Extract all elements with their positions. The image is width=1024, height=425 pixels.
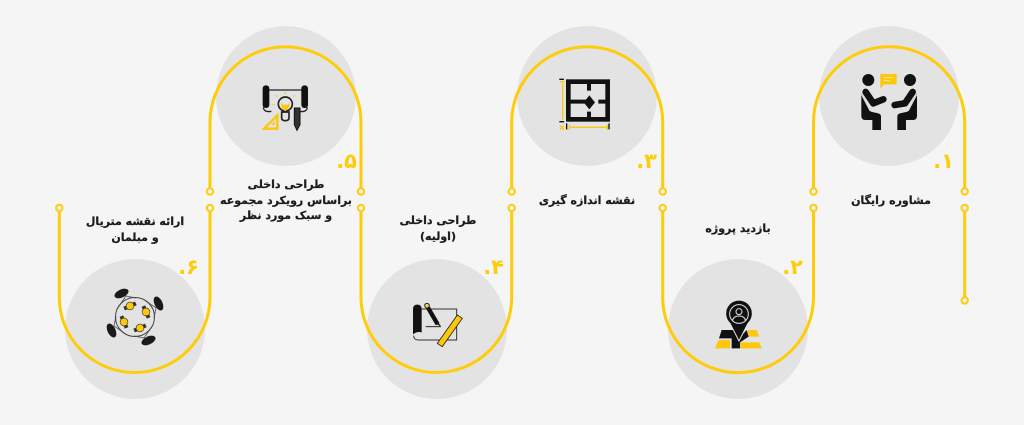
step 5: interior design by approach and style: براساس رویکرد مجموعه [220, 194, 352, 207]
step 5: interior design by approach and style [216, 26, 357, 222]
number 5: ۵. [336, 149, 357, 173]
icon: map with location pin [715, 300, 762, 348]
label 3: نقشه اندازه گیری [539, 194, 635, 207]
step 4: initial interior design [367, 214, 507, 399]
label 1: مشاوره رایگان [851, 194, 931, 207]
step 6: material and furniture plan [65, 215, 205, 399]
icon: two people talking [861, 74, 917, 130]
grey circle 3 [517, 26, 657, 166]
step 2: project visit [668, 222, 808, 399]
step 4: initial interior design: (اولیه) [420, 230, 456, 243]
step 6: material and furniture plan: و مبلمان [111, 231, 159, 244]
label 2: بازدید پروژه [705, 222, 771, 235]
number 2: ۲. [782, 255, 803, 279]
grey circle 6 [65, 259, 205, 399]
number 6: ۶. [178, 255, 199, 279]
step 3: measurement plan [517, 26, 657, 207]
number 3: ۳. [636, 149, 657, 173]
grey circle 5 [216, 26, 356, 166]
yellow winding timeline path [56, 47, 968, 373]
grey circle 1 [819, 26, 959, 166]
step 5: interior design by approach and style: و سبک مورد نظر [239, 209, 332, 222]
label 5: طراحی داخلی [248, 178, 324, 191]
icon: plan with light bulb [263, 85, 308, 130]
label 4: طراحی داخلی [400, 214, 476, 227]
grey circle 4 [367, 259, 507, 399]
icon: round table with chairs [105, 287, 165, 347]
icon: floor plan [559, 79, 609, 130]
icon: drawing sheet, pencil and ruler [413, 303, 462, 347]
number 1: ۱. [933, 149, 954, 173]
label 6: ارائه نقشه متریال [86, 215, 184, 228]
step 1: free consultation [819, 26, 959, 207]
number 4: ۴. [483, 255, 504, 279]
grey circle 2 [668, 259, 808, 399]
